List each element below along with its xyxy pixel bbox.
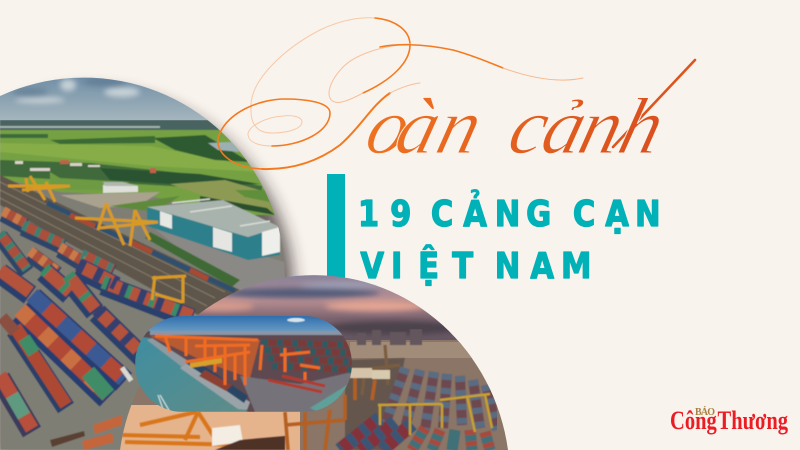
accent bar [327,174,345,294]
photo: container terminal inset [135,316,352,412]
heading: 19 cảng cạn Việt Nam: 19 CẢNG CẠN [358,188,661,235]
container rows [0,211,192,432]
warehouse small [103,182,138,193]
foreground crane [122,411,231,448]
trucks [93,415,122,434]
title: Toàn cảnh: Toàn cảnh [290,81,674,171]
gantry cranes [8,176,186,303]
heading: 19 cảng cạn Việt Nam: VIỆT NAM [360,244,591,287]
photo: rail depot aerial view [0,75,290,450]
photo 1 shadow [0,91,293,450]
warehouse large [147,207,280,260]
ground [0,178,290,450]
rail yard [0,175,240,316]
logo: Báo Công Thương: BÁO [695,406,715,418]
title flourish: calligraphic capital T [218,18,695,169]
heading: 19 cảng cạn Việt Nam [358,188,661,287]
photo: seaport panorama at dusk [115,270,515,450]
